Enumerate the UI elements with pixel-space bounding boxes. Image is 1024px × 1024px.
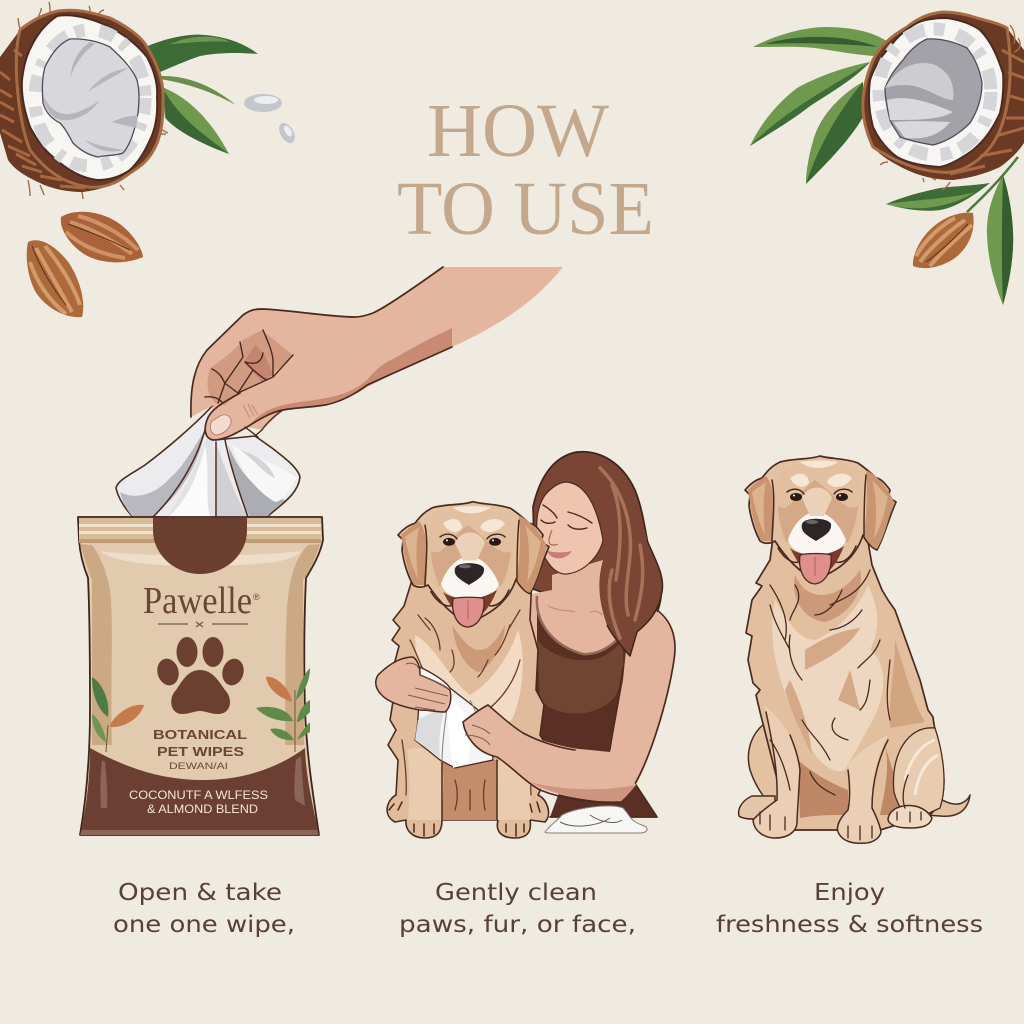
caption 1 — [113, 878, 295, 938]
step 2: woman hugging and wiping dog — [376, 452, 675, 838]
wipe held by woman — [415, 667, 493, 768]
seal band — [79, 518, 321, 566]
package body — [78, 517, 323, 835]
step 1: hand pulling wipe — [116, 267, 563, 517]
brand name: Pawelle — [143, 580, 252, 622]
caption 3: freshness & softness — [716, 910, 983, 938]
face — [537, 482, 603, 574]
almond bottom — [26, 240, 84, 318]
tail — [925, 790, 970, 816]
dog head — [398, 502, 549, 627]
caption 1: Open & take — [118, 878, 282, 906]
wipe — [116, 403, 300, 517]
floor wipe — [545, 806, 647, 833]
haunch — [893, 728, 944, 815]
registered mark: ® — [253, 592, 260, 602]
head — [745, 456, 896, 584]
coconut — [863, 12, 1024, 180]
decoration: top left coconut, leaves, almonds — [0, 2, 298, 325]
body and tank — [525, 560, 675, 817]
caption 3 — [716, 878, 983, 938]
coconut fibres — [880, 25, 1020, 190]
caption 2: Gently clean — [435, 878, 597, 906]
rear left paw — [739, 796, 775, 819]
decoration: top right coconut, leaves, almond — [750, 12, 1024, 305]
title line: how: HOW — [427, 89, 609, 173]
panel shading — [80, 756, 318, 835]
woman left hand — [376, 657, 451, 712]
fur strokes — [760, 570, 921, 840]
brown opening — [153, 518, 247, 574]
brown lower panel — [80, 748, 319, 835]
woman right arm and hand — [463, 705, 636, 802]
side shading — [80, 544, 320, 745]
caption 2: paws, fur, or face, — [399, 910, 636, 938]
step 3: happy golden retriever — [739, 456, 970, 843]
title — [397, 89, 654, 251]
belly shadow — [798, 760, 848, 818]
hair back — [527, 452, 661, 658]
left sprig — [92, 677, 144, 752]
body — [746, 530, 944, 830]
rear left fur — [748, 720, 785, 802]
step captions — [113, 878, 983, 938]
blend label — [129, 790, 268, 816]
chest highlight — [772, 585, 883, 771]
caption 3: Enjoy — [814, 878, 885, 906]
arm and hand — [191, 267, 563, 440]
front left leg — [753, 705, 800, 838]
front right leg — [837, 735, 888, 843]
right sprig — [256, 668, 310, 752]
hind right paw — [888, 806, 932, 828]
leaves — [750, 27, 1018, 305]
hair front — [595, 468, 663, 656]
product name: PET WIPES — [157, 744, 244, 759]
product name — [153, 727, 247, 759]
water droplets — [244, 94, 298, 146]
caption 2 — [399, 878, 636, 938]
brand divider — [158, 622, 248, 627]
paw icon — [154, 637, 247, 714]
title line: to use: TO USE — [397, 167, 654, 251]
dog body — [387, 575, 549, 838]
caption 1: one one wipe, — [113, 910, 295, 938]
blend label: & ALMOND BLEND — [147, 804, 258, 816]
product name: BOTANICAL — [153, 727, 247, 742]
small garbled line: DEWAN/AI — [169, 761, 228, 771]
coconut fibres — [18, 2, 168, 199]
leaves — [143, 35, 258, 154]
almond — [912, 212, 974, 268]
blend label: COCONUTF A WLFESS — [129, 790, 268, 802]
almond top — [60, 212, 143, 262]
coconut — [0, 10, 163, 192]
step 1: wipes package — [78, 517, 323, 835]
